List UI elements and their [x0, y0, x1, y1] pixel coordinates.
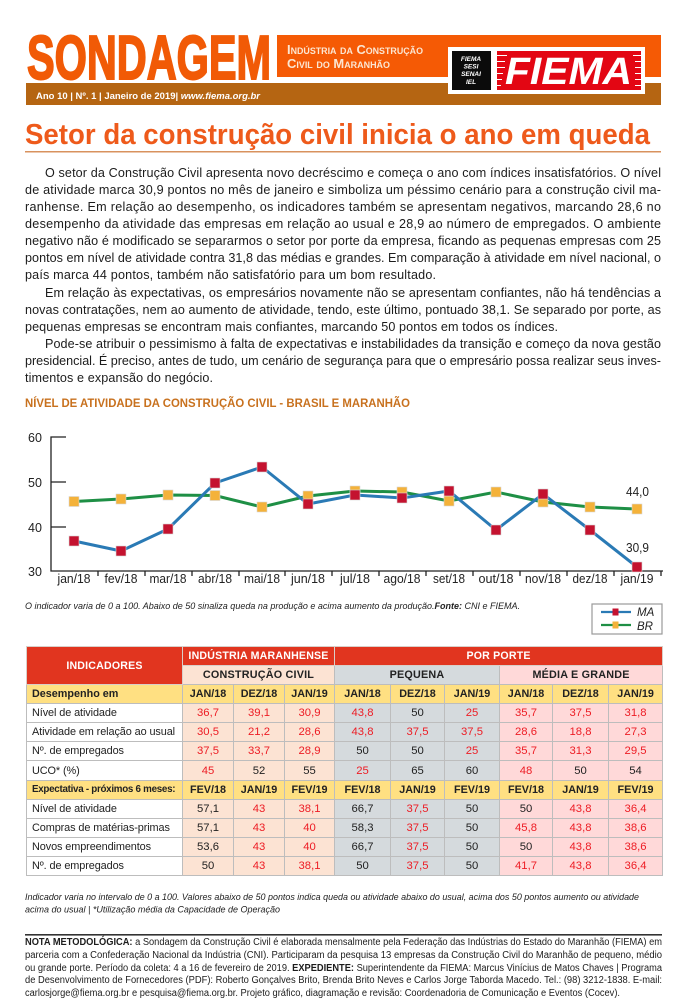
article text: timentos e expansão do negócio.	[25, 371, 213, 385]
data table: 53,6	[197, 841, 219, 853]
data table: 28,6	[298, 726, 320, 738]
axis labels: 60	[28, 431, 42, 445]
data table: JAN/19	[399, 784, 436, 796]
data table: 30,9	[298, 707, 320, 719]
data table: 37,5	[407, 822, 429, 834]
data table: JAN/19	[562, 784, 599, 796]
data table: 52	[253, 764, 265, 776]
data table: Atividade em relação ao usual	[32, 726, 175, 738]
data table: 28,9	[298, 745, 320, 757]
data table: 50	[411, 745, 424, 757]
data table: DEZ/18	[241, 688, 277, 700]
data table: PEQUENA	[390, 669, 444, 681]
logo: FIEMA: FIEMA	[505, 51, 632, 93]
data table: 37,5	[407, 726, 429, 738]
data table: 40	[303, 841, 316, 853]
line chart	[28, 431, 663, 586]
data table: Desempenho em	[32, 688, 118, 700]
data table: 25	[466, 745, 478, 757]
data table: 43	[253, 822, 265, 834]
axis labels: jan/19	[620, 572, 654, 586]
data table: 43	[253, 803, 265, 815]
data table: JAN/19	[291, 688, 328, 700]
data table: INDÚSTRIA MARANHENSE	[188, 650, 329, 662]
header banner	[26, 24, 661, 105]
axis labels: 30	[28, 565, 42, 579]
brown bar	[26, 83, 661, 105]
legend: MA	[637, 607, 655, 619]
data table: 43	[253, 860, 265, 872]
data table: 50	[202, 860, 214, 872]
divider	[25, 934, 662, 936]
data table: 66,7	[352, 841, 374, 853]
data table: 43,8	[352, 707, 374, 719]
data table: 54	[629, 764, 642, 776]
band subtitle	[287, 42, 423, 71]
logo: FIEMA: SENAI	[461, 71, 481, 78]
data table: 36,4	[625, 860, 647, 872]
logo: FIEMA	[448, 47, 645, 94]
data table: 37,5	[407, 803, 429, 815]
data table: 38,6	[625, 841, 647, 853]
table footnote: Indicador varia no intervalo de 0 a 100. Valores abaixo de 50 pontos indica queda ou atividade abaixo do usual, acima dos 50 pontos aumento ou atividade	[25, 891, 639, 902]
axis labels: set/18	[433, 572, 465, 586]
data table: 36,4	[625, 803, 647, 815]
data table: 58,3	[352, 822, 374, 834]
data table: Expectativa - próximos 6 meses:	[32, 784, 175, 795]
axis labels: 40	[28, 521, 42, 535]
data table: 43,8	[570, 803, 592, 815]
legend	[592, 604, 662, 634]
logo: FIEMA: FIEMA	[461, 56, 481, 63]
article text	[25, 166, 661, 385]
data table: 60	[466, 764, 478, 776]
logo: FIEMA: IEL	[466, 79, 476, 86]
article text: pequenas empresas se encontram mais confiantes, marcando 50 pontos em todos os índices.	[25, 320, 558, 334]
data table: 25	[356, 764, 369, 776]
axis labels: 50	[28, 476, 42, 490]
data table: 37,5	[461, 726, 483, 738]
data table: 50	[466, 841, 478, 853]
data table: Novos empreendimentos	[32, 841, 151, 853]
data table: DEZ/18	[562, 688, 599, 700]
data table: 38,1	[298, 803, 320, 815]
methodological note: carlosjorge@fiema.org.br e pesquisa@fiema.org.br. Projeto gráfico, diagramação e revisão: Coordenadoria de Comunicação e Eventos (Cocev).	[25, 988, 620, 999]
data table: 35,7	[515, 745, 537, 757]
data table: 43,8	[570, 860, 592, 872]
series BR	[69, 486, 642, 514]
data table: 50	[520, 803, 532, 815]
article text: O setor da Construção Civil apresenta novo decréscimo e começa o ano com índices insatisfatórios. O nível	[45, 166, 661, 180]
data table: 57,1	[197, 803, 219, 815]
data table: 55	[303, 764, 316, 776]
data table: 50	[356, 745, 369, 757]
article text: ranhense. Em relação ao desempenho, os indicadores também se apresentam negativos, marcando 28,6 no	[25, 200, 661, 214]
data table: UCO* (%)	[32, 764, 80, 776]
methodological note: NOTA METODOLÓGICA: a Sondagem da Construção Civil é elaborada mensalmente pela Federação das Indústrias do Estado do Maranhão (FIEMA) em	[25, 936, 662, 948]
headline: Setor da construção civil inicia o ano em queda	[25, 119, 651, 151]
data table: 30,5	[197, 726, 219, 738]
data table: 65	[411, 764, 424, 776]
data table: 29,5	[625, 745, 647, 757]
data labels: 44,0	[626, 485, 649, 499]
article text: desempenho da atividade das empresas em relação ao usual e 28,9 ao número de empregados. O ambiente	[25, 217, 661, 231]
data table: 57,1	[197, 822, 219, 834]
axis labels: fev/18	[104, 572, 138, 586]
data table: 27,3	[625, 726, 647, 738]
data table: Nº. de empregados	[32, 860, 124, 872]
data table: 66,7	[352, 803, 374, 815]
axis labels: out/18	[478, 572, 514, 586]
orange band	[277, 35, 661, 77]
data table: CONSTRUÇÃO CIVIL	[203, 669, 314, 681]
band subtitle: Indústria da Construção	[287, 42, 423, 57]
data table: 35,7	[515, 707, 537, 719]
legend: BR	[637, 621, 653, 633]
data table: MÉDIA E GRANDE	[532, 669, 630, 681]
data labels	[626, 485, 649, 555]
data table: 37,5	[407, 841, 429, 853]
axis labels: abr/18	[198, 572, 232, 586]
data table: Nº. de empregados	[32, 745, 124, 757]
data table: FEV/18	[508, 784, 544, 796]
data table: 48	[520, 764, 532, 776]
data table: 37,5	[570, 707, 592, 719]
data table: Nível de atividade	[32, 707, 117, 719]
table footnote	[25, 891, 639, 914]
chart note: O indicador varia de 0 a 100. Abaixo de 50 sinaliza queda na produção e acima aumento da produção.Fonte: CNI e FIEMA.	[25, 601, 520, 611]
methodological note: de Desenvolvimento de Fornecedores (PDF): Roberto Gonçalves Brito, Brenda Brito Neves e Carlos Jorge Taborda Macedo. Tel.: (98) 3212-1838. E-mail:	[25, 975, 662, 986]
axis labels: jan/18	[57, 572, 91, 586]
data table: JAN/18	[344, 688, 381, 700]
data table: 25	[466, 707, 478, 719]
methodological note: parceria com a Confederação Nacional da Indústria (CNI). Participaram da pesquisa 13 empresas da Construção Civil do Maranhão de pequeno, médio	[25, 950, 662, 961]
data table: FEV/19	[618, 784, 654, 796]
data table: 39,1	[248, 707, 270, 719]
axes	[51, 437, 663, 576]
data table: FEV/19	[292, 784, 328, 796]
article text: pontos em nível de atividade contra 31,8 das médias e grandes. Em comparação à atividade em nível nacional, o	[25, 251, 661, 265]
data table: 50	[466, 822, 478, 834]
data table: FEV/18	[344, 784, 381, 796]
axis labels: jun/18	[290, 572, 325, 586]
issue line: Ano 10 | Nº. 1 | Janeiro de 2019| www.fiema.org.br	[36, 91, 261, 102]
axis labels: nov/18	[525, 572, 561, 586]
axis labels: jul/18	[339, 572, 370, 586]
data table: INDICADORES	[66, 660, 143, 672]
data table	[26, 646, 663, 876]
band subtitle: Civil do Maranhão	[287, 56, 390, 71]
data table: 41,7	[515, 860, 537, 872]
data table: 40	[303, 822, 316, 834]
data labels: 30,9	[626, 541, 649, 555]
data table: POR PORTE	[466, 650, 531, 662]
data table: Compras de matérias-primas	[32, 822, 170, 834]
methodological note: ou grande porte. Período da coleta: 4 a 16 de fevereiro de 2019. EXPEDIENTE: Superintendente da FIEMA: Marcus Vinícius de Matos Chaves | Programa	[25, 963, 662, 974]
data table: 45,8	[515, 822, 537, 834]
article text: Pode-se atribuir o pessimismo à falta de expectativas e instabilidades da transição e começo da nova gestão	[45, 337, 661, 351]
data table: 50	[466, 803, 478, 815]
axis labels: mar/18	[150, 572, 187, 586]
data table: 37,5	[197, 745, 219, 757]
data table: JAN/18	[508, 688, 544, 700]
data table: 36,7	[197, 707, 219, 719]
data table: 18,8	[570, 726, 592, 738]
axis labels: ago/18	[384, 572, 421, 586]
data table: 38,6	[625, 822, 647, 834]
data table: 43,8	[570, 841, 592, 853]
methodological note	[25, 936, 662, 999]
data table: 50	[411, 707, 424, 719]
data table: DEZ/18	[399, 688, 436, 700]
data table: FEV/18	[190, 784, 226, 796]
data table: JAN/19	[617, 688, 654, 700]
data table: 50	[520, 841, 532, 853]
data table: 50	[356, 860, 369, 872]
data table: 37,5	[407, 860, 429, 872]
data table: 43,8	[570, 822, 592, 834]
data table: 45	[202, 764, 214, 776]
data table: FEV/19	[454, 784, 490, 796]
logo: FIEMA: SESI	[464, 64, 479, 70]
axis labels: dez/18	[572, 572, 608, 586]
data table: JAN/18	[190, 688, 226, 700]
table footnote: acima do usual | *Utilização média da Capacidade de Operação	[25, 904, 280, 914]
data table: JAN/19	[241, 784, 277, 796]
data table: 43	[253, 841, 265, 853]
data table: 38,1	[298, 860, 320, 872]
data table: JAN/19	[454, 688, 490, 700]
article text: de atividade marca 30,9 pontos no mês de janeiro e simboliza um péssimo cenário para a construção civil ma-	[25, 183, 661, 197]
article text: Em relação às expectativas, os empresários novamente não se apresentam confiantes, não há tendências a	[45, 286, 661, 300]
series MA	[69, 462, 642, 572]
data table: Nível de atividade	[32, 803, 117, 815]
axis labels: mai/18	[244, 572, 280, 586]
data table: 28,6	[515, 726, 537, 738]
data table: 31,3	[570, 745, 592, 757]
data table: 50	[574, 764, 587, 776]
title: SONDAGEM: SONDAGEM	[27, 24, 271, 93]
data table: 43,8	[352, 726, 374, 738]
data table: 21,2	[248, 726, 270, 738]
chart heading: NÍVEL DE ATIVIDADE DA CONSTRUÇÃO CIVIL - BRASIL E MARANHÃO	[25, 397, 410, 410]
article text: país marca 44 pontos, também não satisfatório para um bom resultado.	[25, 268, 436, 282]
axis labels	[28, 431, 654, 586]
data table: 31,8	[625, 707, 647, 719]
data table: 33,7	[248, 745, 270, 757]
article text: novas contratações, nem ao aumento de atividade, tendo, este último, pontuado 38,1. Se separado por porte, as	[25, 303, 661, 317]
article text: negativo não é modificado se separarmos o setor por porte da empresa, ficando as pequenas empresas com 25	[25, 234, 661, 248]
article text: presidencial. É preciso, antes de tudo, um cenário de segurança para que o empresário possa realizar seus inves-	[25, 353, 661, 368]
data table: 50	[466, 860, 478, 872]
